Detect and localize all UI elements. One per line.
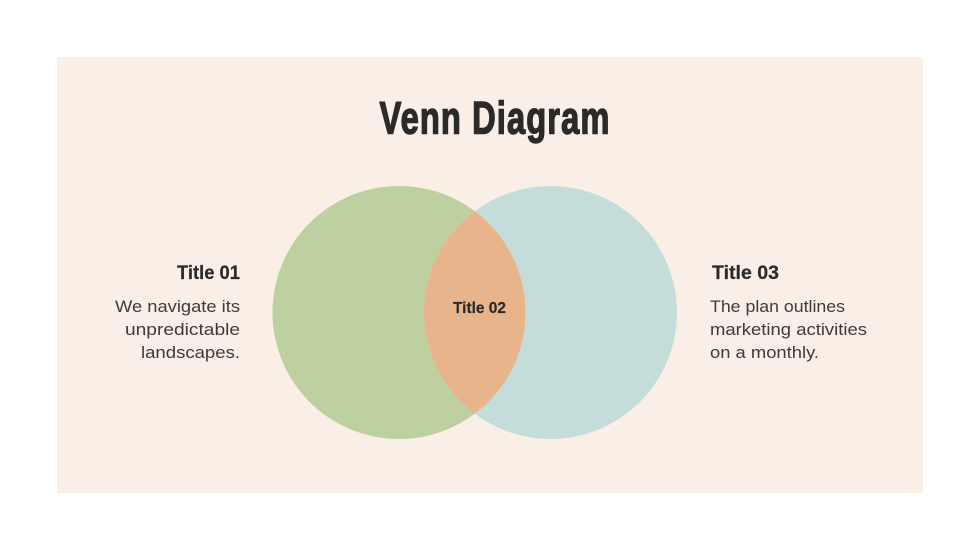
panel: background (57, 57, 923, 493)
circle: left (272, 186, 526, 439)
body: on a monthly. (710, 343, 819, 362)
body: The plan outlines (710, 297, 845, 316)
heading: Title 01 (177, 263, 240, 284)
body: We navigate its (115, 297, 240, 316)
circle: right (424, 186, 677, 439)
body (115, 297, 240, 362)
body: marketing activities (710, 320, 867, 339)
text block: title 03 (710, 263, 867, 362)
body: unpredictable (125, 320, 240, 339)
body (710, 297, 867, 362)
heading: Title 03 (712, 263, 779, 284)
venn diagram (272, 186, 677, 439)
title: Venn Diagram (380, 92, 610, 144)
text block: title 01 (115, 263, 240, 362)
overlap (424, 211, 525, 414)
label: title 02: Title 02 (453, 300, 506, 317)
body: landscapes. (141, 343, 240, 362)
